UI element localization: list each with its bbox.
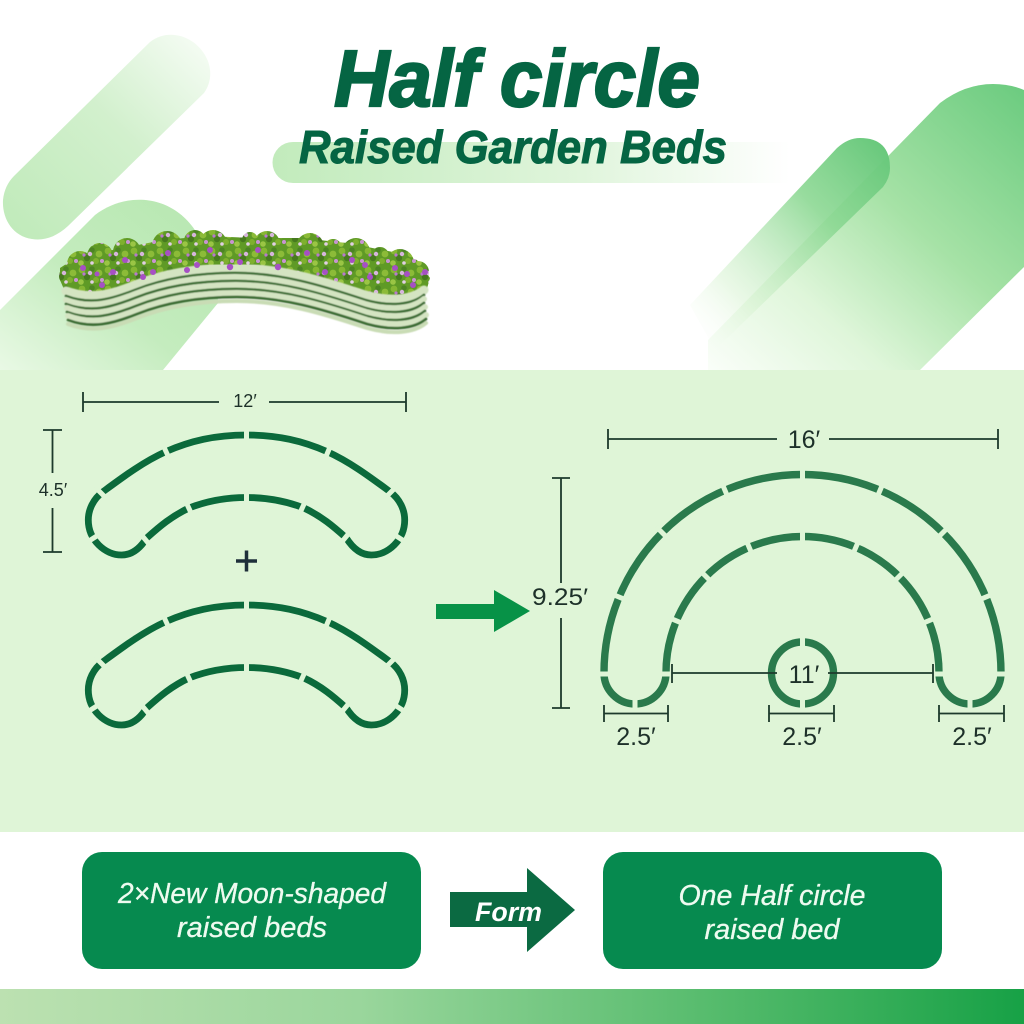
arrow: form	[450, 868, 575, 952]
title: Half circle	[334, 34, 700, 123]
dimension: left 2.5 feet: 2.5′	[616, 723, 656, 751]
dimension: 9.25 feet height: 9.25′	[532, 584, 589, 611]
dimension: 16 feet width	[608, 426, 998, 454]
bed body stripes	[66, 268, 426, 332]
callout: one half circle bed: One Half circle	[678, 880, 866, 912]
dimension: left 2.5 feet	[604, 705, 668, 751]
callout: two moon-shaped beds: raised beds	[177, 912, 327, 944]
half circle bed	[597, 466, 1008, 712]
dimension: 12 feet width	[83, 391, 406, 412]
panel: dimensions background	[0, 370, 1024, 832]
moon-shaped bed: top	[88, 428, 405, 555]
moon-shaped bed: bottom	[88, 598, 405, 725]
dimension: 11 feet inner width	[672, 661, 933, 689]
dimension: 4.5 feet depth	[39, 430, 68, 552]
background shape: small right capsule	[690, 138, 890, 350]
dimension: centre 2.5 feet	[769, 705, 834, 751]
dimension: 12 feet width: 12′	[233, 391, 257, 411]
subtitle highlight pill	[272, 142, 790, 183]
dimension: centre 2.5 feet: 2.5′	[782, 723, 822, 751]
arrow: form: Form	[475, 897, 542, 927]
foliage	[59, 230, 430, 300]
background shape: top-left capsule	[3, 35, 210, 239]
dimension: right 2.5 feet: 2.5′	[952, 723, 992, 751]
plus sign	[236, 550, 257, 572]
dimension: 4.5 feet depth: 4.5′	[39, 480, 68, 500]
background shape: left rounded capsule	[0, 200, 218, 370]
footer gradient bar	[0, 989, 1024, 1024]
callout: one half circle bed: raised bed	[704, 914, 840, 946]
purple flowers	[80, 247, 428, 288]
illustration: planted raised garden bed	[59, 230, 430, 332]
centre circle bed	[772, 635, 834, 711]
subtitle: Raised Garden Beds	[299, 121, 727, 173]
dimension: 11 feet inner width: 11′	[789, 661, 820, 689]
arrow: combine	[436, 590, 530, 632]
dimension: 16 feet width: 16′	[788, 426, 821, 454]
callout: two moon-shaped beds: 2×New Moon-shaped	[117, 878, 387, 910]
callout: two moon-shaped beds	[82, 852, 421, 969]
dimension: 9.25 feet height	[532, 478, 589, 708]
dimension: right 2.5 feet	[939, 705, 1004, 751]
callout: one half circle bed	[603, 852, 942, 969]
background shape: large right capsule	[708, 84, 1024, 370]
